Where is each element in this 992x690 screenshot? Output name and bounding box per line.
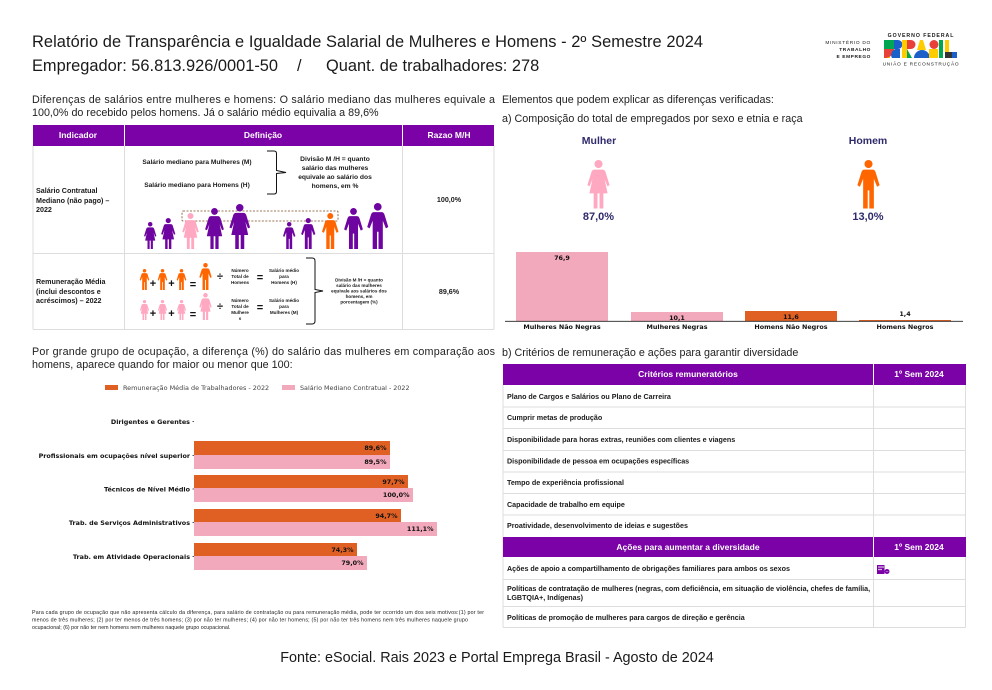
row 2 women formula: Salário médio	[269, 298, 299, 303]
bar chart: ocupações: 111,1%	[407, 525, 434, 533]
intro text: grande grupo de ocupação	[32, 346, 495, 371]
bar chart: ocupações: 94,7%	[375, 512, 398, 520]
actions rows: LGBTQIA+, Indígenas)	[507, 594, 584, 602]
row 2 men formula: +	[150, 278, 156, 290]
row 2 men formula: Homens	[231, 280, 250, 285]
actions rows	[507, 565, 870, 622]
table header: Razao M/H	[428, 130, 470, 140]
criteria rows	[507, 393, 735, 530]
bar chart: composição: 76,9	[554, 254, 570, 262]
row 2 indicator: (inclui descontos e	[36, 288, 101, 296]
logo: governo federal brasil	[883, 33, 959, 68]
row 1 definition text: salário das mulheres	[302, 165, 369, 172]
table header: Indicador	[59, 130, 98, 140]
footnote: ocupacional; (6) por não ter nem homens nem mulheres naquele grupo ocupacional.	[32, 625, 230, 631]
woman share: Mulher	[582, 135, 616, 147]
row 2 men formula: ÷	[217, 271, 223, 283]
row 1 indicator: Mediano (não pago) –	[36, 197, 109, 205]
row 1 definition text: Salário mediano para Homens (H)	[144, 182, 250, 189]
row 1 indicator	[36, 187, 109, 214]
bar chart: ocupações: Trab. de Serviços Administrativos	[69, 519, 190, 527]
chart legend: Salário Mediano Contratual - 2022	[300, 384, 410, 392]
heading: critérios de remuneração: b) Critérios de remuneração e ações para garantir diversidade	[502, 347, 798, 359]
row 1 indicator: Salário Contratual	[36, 187, 98, 195]
row 2 women formula: =	[190, 309, 196, 321]
bar chart: ocupações: Técnicos de Nível Médio	[104, 486, 191, 494]
row 2 women formula: Mulheres (M)	[270, 310, 299, 315]
row 2 indicator	[36, 278, 106, 305]
logo: ministério do trabalho e emprego: TRABALHO	[839, 47, 871, 53]
bar chart: composição: Mulheres Não Negras	[523, 323, 601, 331]
row 2 indicator: Remuneração Média	[36, 278, 106, 286]
logo: ministério do trabalho e emprego: E EMPREGO	[837, 54, 871, 60]
criteria rows: Tempo de experiência profissional	[507, 479, 624, 487]
intro text: diferenças de salários: Diferenças de salários entre mulheres e homens: O salário mediano das mulheres equivale a	[32, 94, 495, 106]
row 1 value: 100,0%	[437, 196, 462, 204]
row 2 women formula: Mulhere	[231, 310, 249, 315]
intro text: diferenças de salários: 100,0% do recebido pelos homens. Já o salário médio equivalia a 89,6%	[32, 107, 379, 119]
bar chart: ocupações: Dirigentes e Gerentes	[111, 418, 190, 426]
logo: governo federal brasil: GOVERNO FEDERAL	[888, 33, 954, 39]
man share: 13,0%	[852, 211, 884, 223]
row 2 women formula: para	[279, 304, 289, 309]
criteria rows: Proatividade, desenvolvimento de ideias e sugestões	[507, 522, 688, 530]
title	[32, 33, 703, 75]
row 1 bracket	[267, 151, 286, 194]
table header: Definição	[244, 130, 282, 140]
criteria header: Critérios remuneratórios	[638, 369, 738, 379]
bar chart: composição: 11,6	[783, 313, 799, 321]
row 1 women icons	[144, 204, 250, 249]
criteria rows: Capacidade de trabalho em equipe	[507, 501, 625, 509]
row 2 division text: homens, em	[346, 294, 372, 299]
heading: elementos explicativos: a) Composição do total de empregados por sexo e etnia e raça	[502, 113, 803, 125]
row 2 men formula: Total de	[231, 274, 249, 279]
row 1 definition text: Salário mediano para Mulheres (M)	[142, 159, 252, 166]
criteria rows: Disponibilidade para horas extras, reuniões com clientes e viagens	[507, 436, 735, 444]
bar chart: ocupações: 89,6%	[364, 444, 387, 452]
title: Relatório de Transparência e Igualdade Salarial de Mulheres e Homens - 2º Semestre 2024	[32, 33, 703, 51]
actions header: 1º Sem 2024	[894, 542, 944, 552]
row 2 women formula: +	[150, 308, 156, 320]
heading: elementos explicativos: Elementos que podem explicar as diferenças verificadas:	[502, 94, 774, 106]
row 2 women formula: Total de	[231, 304, 249, 309]
bar chart: ocupações: Profissionais em ocupações nível superior	[39, 452, 191, 460]
row 2 women formula: ÷	[217, 301, 223, 313]
actions rows: Políticas de contratação de mulheres (negras, com deficiência, em situação de violência, chefes de família,	[507, 585, 870, 593]
panel: indicator table	[33, 125, 494, 330]
bar chart: ocupações: 97,7%	[382, 478, 405, 486]
row 2 women formula: s	[239, 316, 242, 321]
table grid	[503, 385, 966, 628]
row 1 indicator: 2022	[36, 206, 52, 214]
intro text: diferenças de salários	[32, 94, 495, 119]
logo: governo federal brasil: UNIÃO E RECONSTRUÇÃO	[883, 60, 959, 68]
table grid	[33, 146, 494, 330]
criteria header: 1º Sem 2024	[894, 369, 944, 379]
bar chart: composição: Homens Negros	[877, 323, 934, 331]
title: Empregador: 56.813.926/0001-50	[32, 57, 278, 75]
woman share	[582, 135, 616, 223]
bar chart: ocupações: 79,0%	[341, 559, 364, 567]
row 2 men formula: =	[257, 272, 263, 284]
row 2 division text: equivale aos salários dos	[331, 288, 387, 294]
chart legend	[105, 384, 410, 392]
row 2 division text	[331, 278, 387, 304]
logo: ministério do trabalho e emprego: MINISTÉRIO DO	[825, 39, 871, 46]
row 2 indicator: acréscimos) – 2022	[36, 297, 102, 305]
row 2 value: 89,6%	[439, 288, 460, 296]
row 2 men formula: para	[279, 274, 289, 279]
row 1 definition text: equivale ao salário dos	[298, 174, 372, 181]
actions rows: Políticas de promoção de mulheres para cargos de direção e gerência	[507, 614, 746, 622]
man share	[849, 135, 887, 223]
row 2 men formula: +	[168, 278, 175, 290]
bar chart: ocupações: 89,5%	[364, 458, 387, 466]
footnote: menos de três mulheres; (2) por ter menos de três homens; (3) por não ter mulheres; (4) por não ter homens; (5) por não ter três homens nem três mulheres naquele grupo	[32, 618, 468, 624]
heading: elementos explicativos	[502, 94, 803, 125]
bar chart: composição: Mulheres Negras	[646, 323, 708, 331]
row 1 definition text: homens, em %	[312, 183, 358, 190]
row 2 men formula: =	[190, 279, 196, 291]
row 2 men formula: Número	[231, 268, 249, 273]
criteria header	[503, 364, 966, 385]
intro text: grande grupo de ocupação: homens, aparece quando for maior ou menor que 100:	[32, 359, 293, 371]
row 2 men formula: Homens (H)	[271, 280, 297, 285]
row 1 median box	[182, 211, 338, 221]
man share: Homem	[849, 135, 887, 147]
row 2 division text: Divisão M /H = quanto	[335, 278, 383, 282]
row 1 men icons	[283, 203, 388, 249]
row 2 women formula: +	[168, 308, 175, 320]
row 1 definition text	[142, 156, 372, 190]
bar chart: ocupações: 74,3%	[331, 546, 354, 554]
actions header	[503, 537, 966, 557]
actions rows: Ações de apoio a compartilhamento de obrigações familiares para ambos os sexos	[507, 565, 790, 573]
criteria rows: Disponibilidade de pessoa em ocupações específicas	[507, 458, 689, 466]
bar chart: ocupações	[39, 418, 437, 570]
row 2 men formula	[140, 263, 299, 291]
panel: criteria table	[503, 364, 966, 628]
row 2 men formula: Salário médio	[269, 268, 299, 273]
bar chart: composição: 10,1	[669, 314, 685, 322]
table header	[33, 125, 494, 146]
bar chart: composição	[505, 252, 963, 331]
title: Quant. de trabalhadores: 278	[326, 57, 539, 75]
row 2 bracket	[306, 258, 323, 324]
logo: ministério do trabalho e emprego	[825, 39, 871, 60]
actions header: Ações para aumentar a diversidade	[616, 542, 760, 552]
row 2 division text: salário das mulheres	[336, 283, 382, 288]
row 2 women formula: =	[257, 302, 263, 314]
intro text: grande grupo de ocupação: Por grande grupo de ocupação, a diferença (%) do salário das mulheres em comparação aos	[32, 346, 495, 358]
row 2 division text: porcentagem (%)	[340, 300, 378, 304]
row 2 women formula: Número	[231, 298, 249, 303]
row 1 definition text: Divisão M /H = quanto	[300, 156, 370, 163]
title: /	[297, 57, 302, 75]
row 2 women formula	[140, 293, 299, 321]
bar chart: composição: Homens Não Negros	[754, 323, 828, 331]
icon: building check	[877, 565, 890, 574]
criteria rows: Cumprir metas de produção	[507, 414, 603, 422]
source note: Fonte: eSocial. Rais 2023 e Portal Emprega Brasil - Agosto de 2024	[280, 650, 714, 666]
criteria rows: Plano de Cargos e Salários ou Plano de Carreira	[507, 393, 672, 401]
bar chart: ocupações: Trab. em Atividade Operacionais	[73, 553, 190, 561]
woman share: 87,0%	[583, 211, 614, 223]
bar chart: ocupações: 100,0%	[383, 491, 410, 499]
footnote	[32, 610, 484, 631]
chart legend: Remuneração Média de Trabalhadores - 2022	[123, 384, 269, 392]
bar chart: composição: 1,4	[899, 310, 911, 318]
footnote: Para cada grupo de ocupação que não apresenta cálculo da diferença, para salário de contratação ou para remuneração média, pode ter ocorrido um dos seis motivos:(1) por ter	[32, 610, 484, 616]
